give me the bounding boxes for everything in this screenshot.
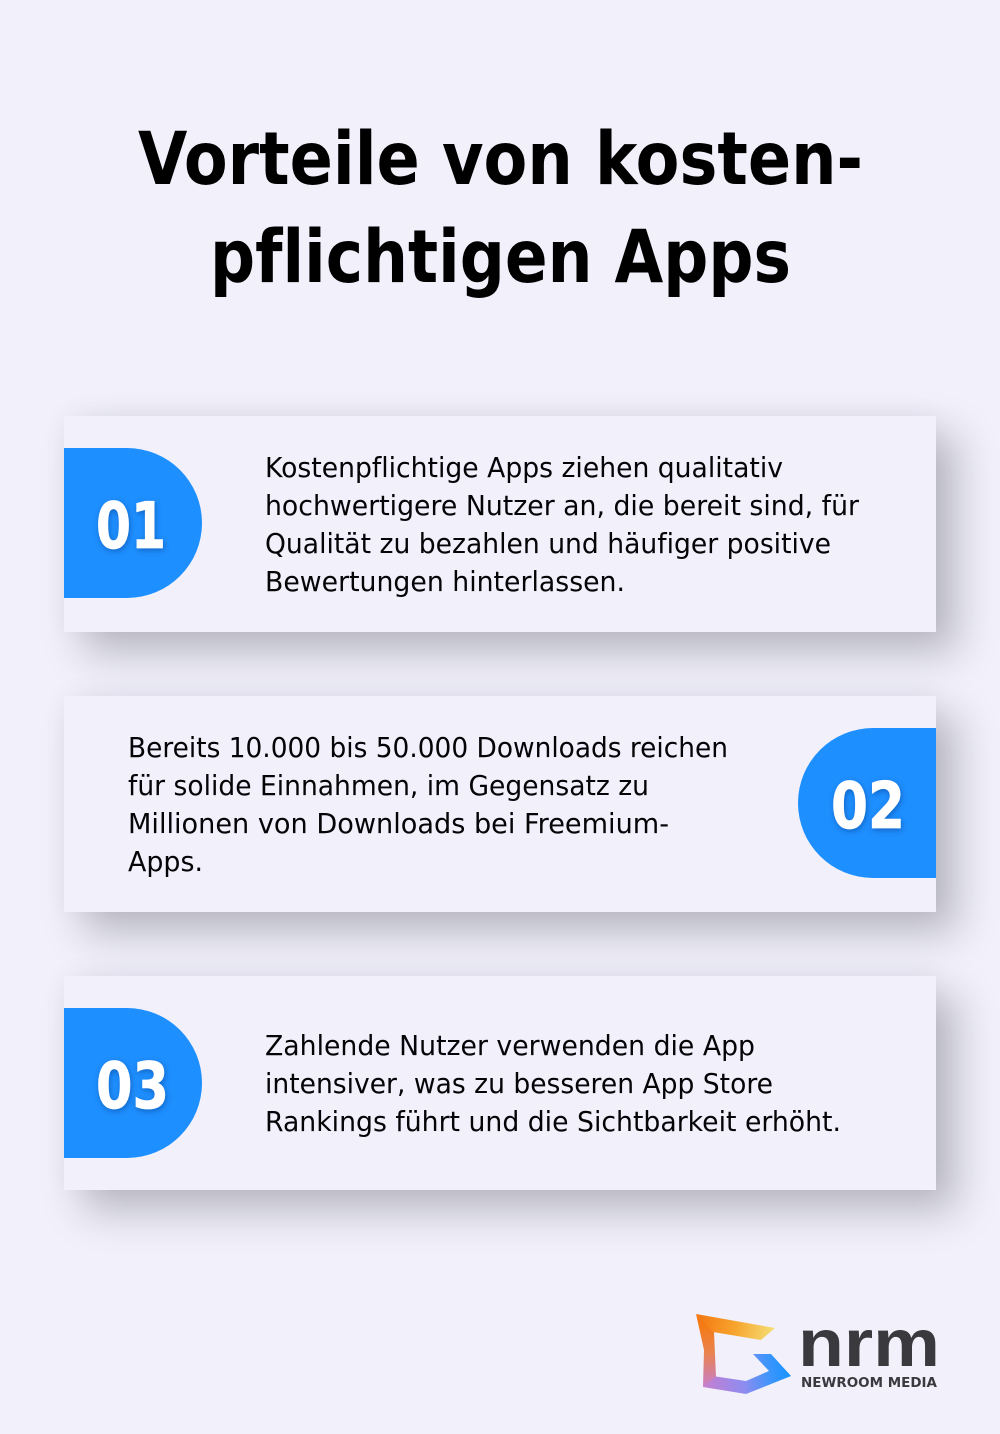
text block 02: Bereits 10.000 bis 50.000 Downloads reichen xyxy=(128,732,728,764)
text block 02: Apps. xyxy=(128,846,203,878)
panel: benefit 01 xyxy=(64,416,936,632)
logo: nrm Newroom Media xyxy=(696,1306,940,1394)
panel: benefit 02 xyxy=(64,696,936,912)
number badge 03: 03 xyxy=(96,1050,169,1124)
logo wordmark: NEWROOM MEDIA xyxy=(801,1375,938,1391)
number badge 01 xyxy=(64,448,202,598)
text block 01: Qualität zu bezahlen und häufiger positive xyxy=(265,528,831,560)
text block 01 xyxy=(265,452,860,598)
title xyxy=(138,117,863,300)
title: Vorteile von kosten- xyxy=(138,117,863,202)
text block 03: Zahlende Nutzer verwenden die App xyxy=(265,1030,755,1062)
logo wordmark: nrm xyxy=(798,1306,940,1381)
text block 03 xyxy=(265,1030,841,1138)
number badge 02 xyxy=(798,728,936,878)
text block 03: Rankings führt und die Sichtbarkeit erhöht. xyxy=(265,1106,841,1138)
text block 01: Kostenpflichtige Apps ziehen qualitativ xyxy=(265,452,783,484)
number badge 03 xyxy=(64,1008,202,1158)
text block 02: für solide Einnahmen, im Gegensatz zu xyxy=(128,770,649,802)
title: pflichtigen Apps xyxy=(210,215,791,300)
text block 01: Bewertungen hinterlassen. xyxy=(265,566,625,598)
text block 03: intensiver, was zu besseren App Store xyxy=(265,1068,773,1100)
number badge 02: 02 xyxy=(831,770,905,844)
panel: benefit 03 xyxy=(64,976,936,1190)
text block 02: Millionen von Downloads bei Freemium- xyxy=(128,808,669,840)
text block 02 xyxy=(128,732,728,878)
logo mark xyxy=(696,1314,791,1394)
text block 01: hochwertigere Nutzer an, die bereit sind, für xyxy=(265,490,860,522)
number badge 01: 01 xyxy=(96,490,166,564)
